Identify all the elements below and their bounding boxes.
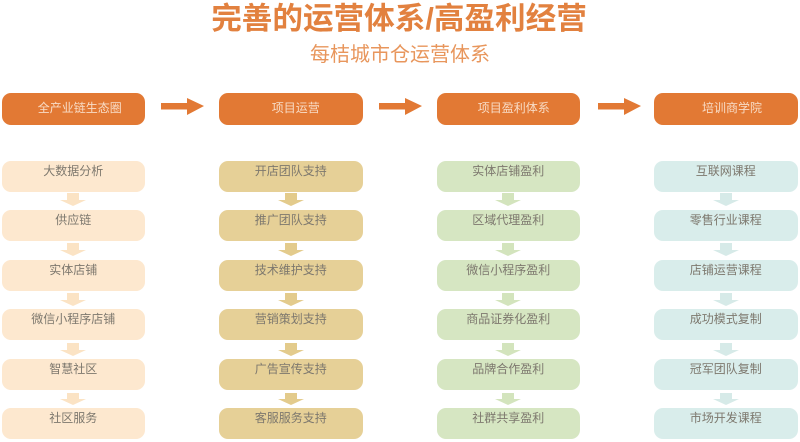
- panel: column 1 items: [2, 161, 145, 439]
- item: 大数据分析: [43, 164, 103, 178]
- flow arrows: column 1: [60, 193, 86, 405]
- item: [654, 260, 798, 291]
- item: 实体店铺盈利: [472, 164, 544, 178]
- item: [436, 408, 580, 439]
- item: 店铺运营课程: [690, 263, 762, 277]
- item: [436, 210, 580, 241]
- arrow: column 2 to column 3: [379, 98, 422, 115]
- column 4 header: 培训商学院: [702, 101, 762, 115]
- item: [436, 309, 580, 340]
- flow arrows: column 2: [278, 193, 304, 405]
- item: 互联网课程: [696, 164, 756, 178]
- item: 品牌合作盈利: [472, 362, 544, 376]
- item: [654, 359, 798, 390]
- item: [219, 309, 362, 340]
- item: [2, 408, 145, 439]
- item: 广告宣传支持: [255, 362, 327, 376]
- item: 社区服务: [49, 411, 97, 425]
- item: 实体店铺: [49, 263, 97, 277]
- flow arrows: column 4: [713, 193, 739, 405]
- item: [2, 260, 145, 291]
- panel: column 2 items: [219, 161, 363, 439]
- item: [2, 210, 145, 241]
- item: [219, 408, 362, 439]
- subtitle: 每桔城市仓运营体系: [310, 44, 490, 66]
- item: [654, 210, 798, 241]
- item: 供应链: [55, 213, 91, 227]
- arrow: column 1 to column 2: [161, 98, 204, 115]
- column 4 header: [654, 93, 798, 125]
- flow arrows: column 3: [495, 193, 521, 405]
- item: [2, 309, 145, 340]
- item: [219, 161, 362, 192]
- item: [436, 260, 580, 291]
- item: 区域代理盈利: [472, 213, 544, 227]
- item: 微信小程序盈利: [466, 263, 550, 277]
- item: 冠军团队复制: [690, 362, 762, 376]
- item: 社群共享盈利: [472, 411, 544, 425]
- item: [654, 408, 798, 439]
- item: [2, 161, 145, 192]
- item: 推广团队支持: [255, 213, 327, 227]
- item: 开店团队支持: [255, 164, 327, 178]
- item: [2, 359, 145, 390]
- arrow: column 3 to column 4: [598, 98, 641, 115]
- item: 技术维护支持: [255, 263, 327, 277]
- item: 零售行业课程: [690, 213, 762, 227]
- item: 营销策划支持: [255, 312, 327, 326]
- column 1 header: [2, 93, 145, 125]
- column 3 header: [436, 93, 580, 125]
- item: 客服服务支持: [255, 411, 327, 425]
- item: [219, 359, 362, 390]
- column 2 header: 项目运营: [272, 101, 320, 115]
- item: [654, 309, 798, 340]
- item: 成功模式复制: [690, 312, 762, 326]
- column 2 header: [219, 93, 362, 125]
- item: [219, 210, 362, 241]
- item: 智慧社区: [49, 362, 97, 376]
- panel: column 3 items: [437, 161, 580, 439]
- item: 商品证券化盈利: [466, 312, 550, 326]
- column 1 header: 全产业链生态圈: [38, 101, 122, 115]
- item: [219, 260, 362, 291]
- title: 完善的运营体系/高盈利经营: [211, 2, 587, 36]
- item: [654, 161, 798, 192]
- panel: column 4 items: [654, 161, 798, 439]
- item: 市场开发课程: [690, 411, 762, 425]
- item: 微信小程序店铺: [31, 312, 115, 326]
- item: [436, 359, 580, 390]
- column 3 header: 项目盈利体系: [478, 101, 550, 115]
- item: [436, 161, 580, 192]
